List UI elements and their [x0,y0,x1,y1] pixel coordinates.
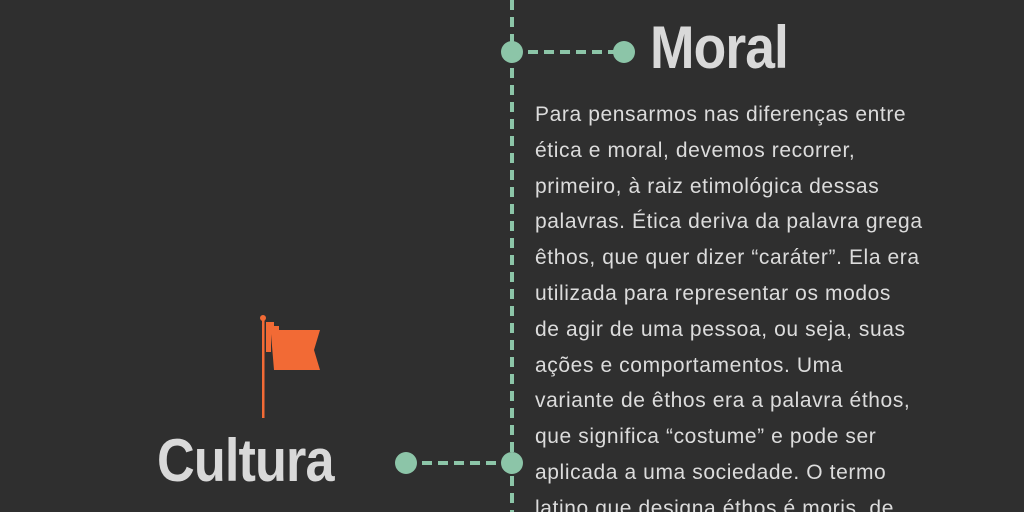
heading: Moral: Moral [650,14,788,81]
text block: moral description: ações e comportamentos. Uma [535,354,843,377]
text block: moral description: que significa “costume” e pode ser [535,425,876,448]
text block: moral description: aplicada a uma sociedade. O termo [535,461,886,484]
text block: moral description [535,103,923,512]
text block: moral description: Para pensarmos nas diferenças entre [535,103,906,126]
text block: moral description: êthos, que quer dizer “caráter”. Ela era [535,246,920,269]
text block: moral description: ética e moral, devemos recorrer, [535,139,855,162]
heading: Cultura: Cultura [157,427,334,494]
text block: moral description: de agir de uma pessoa, ou seja, suas [535,318,906,341]
text block: moral description: palavras. Ética deriva da palavra grega [535,210,923,233]
text block: moral description: variante de êthos era a palavra éthos, [535,389,910,412]
icon: flag [260,315,320,418]
text block: moral description: utilizada para representar os modos [535,282,891,305]
text block: moral description: primeiro, à raiz etimológica dessas [535,175,879,198]
